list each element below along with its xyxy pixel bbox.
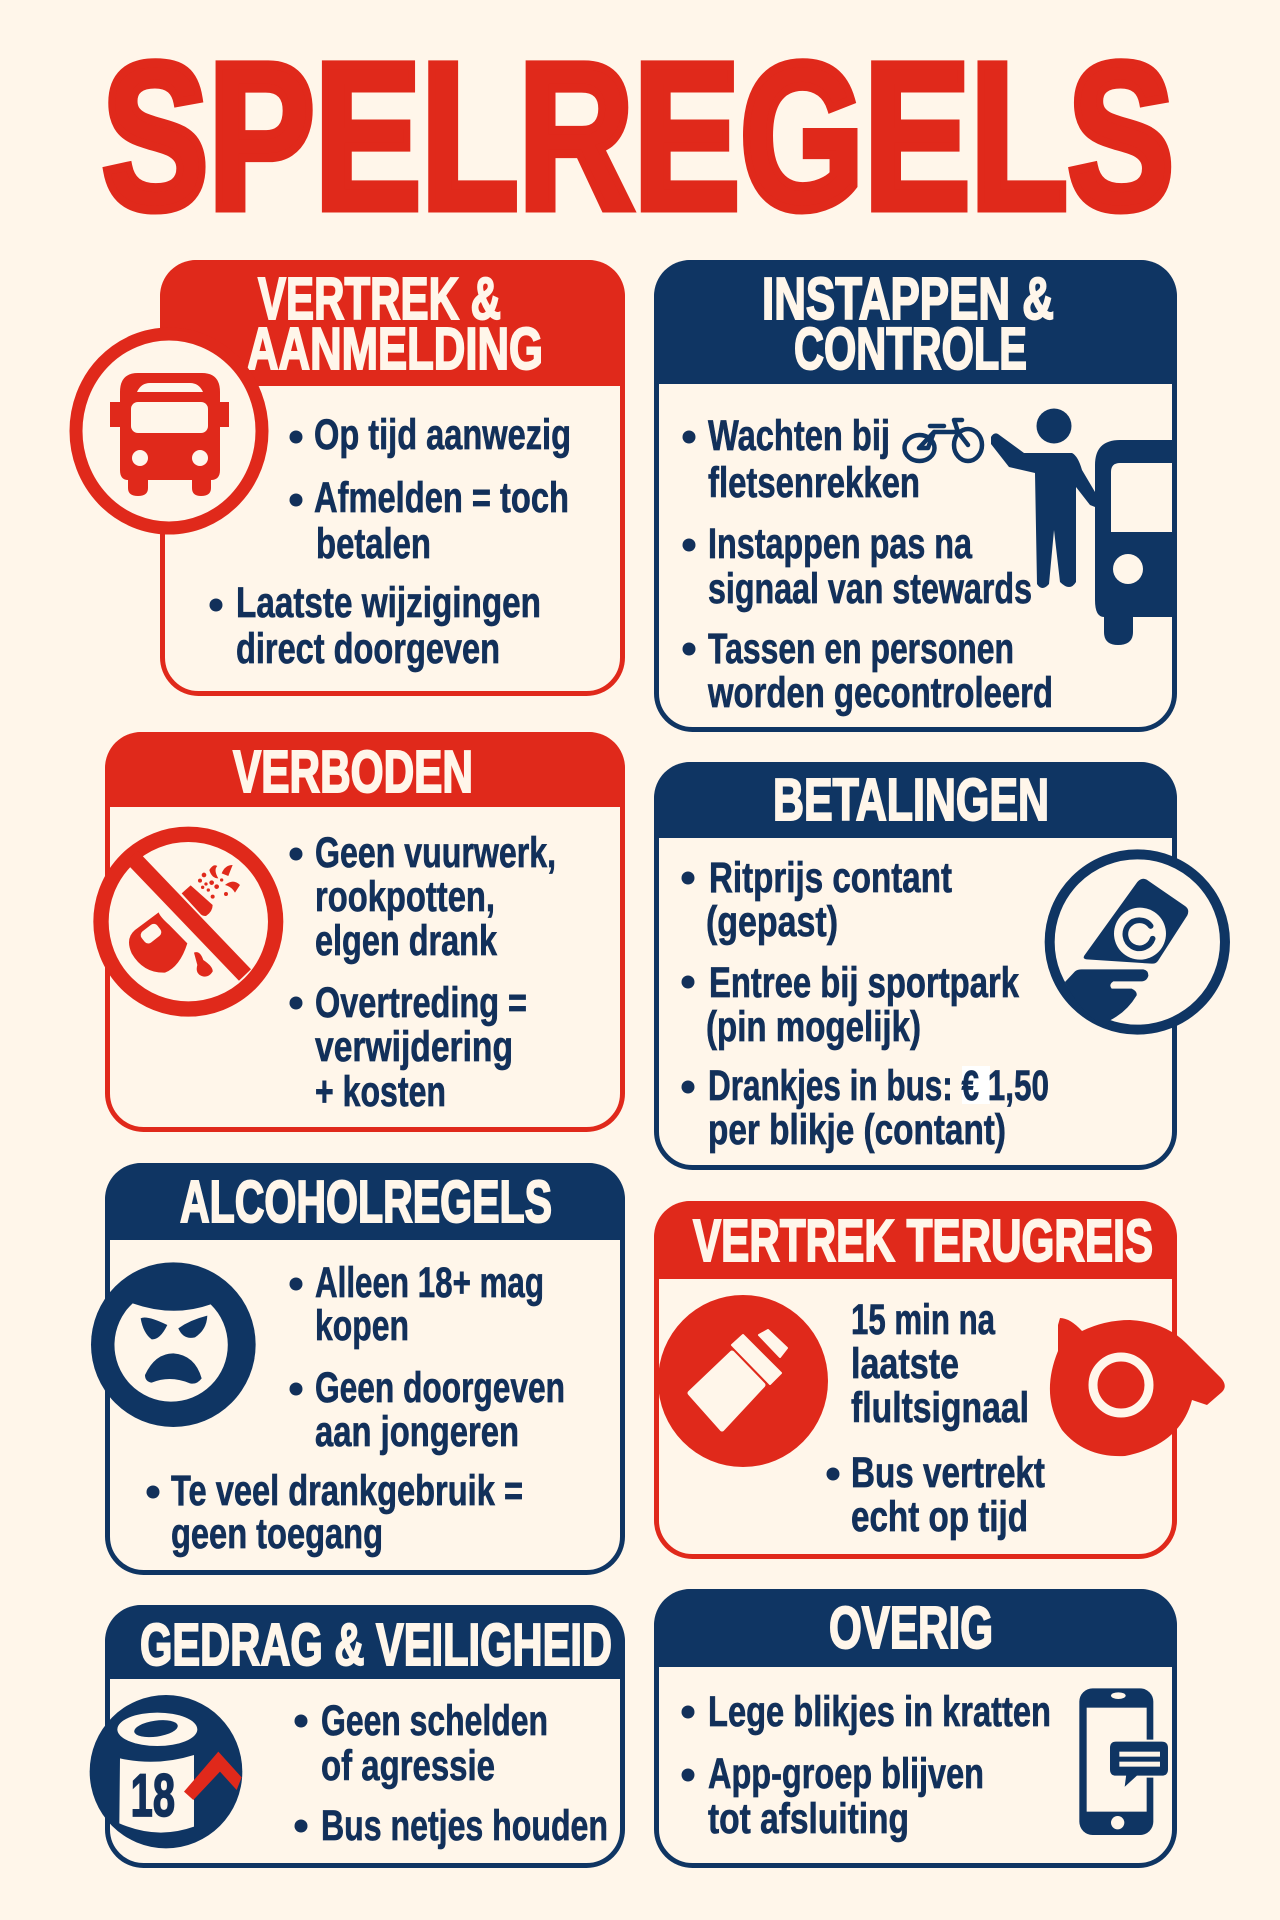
text block: terugreis details: flultsignaal xyxy=(851,1384,1029,1432)
panel: vertrek terugreis xyxy=(654,1201,1225,1556)
text block: instappen bullets: Instappen pas na xyxy=(708,520,973,568)
text block: terugreis details: Bus vertrekt xyxy=(851,1449,1045,1497)
panel: verboden xyxy=(101,732,625,1130)
text block: instappen bullets: Wachten bij xyxy=(708,412,890,460)
icon: bus in circle xyxy=(76,334,262,528)
text block: betalingen bullets: (gepast) xyxy=(706,898,838,946)
text block: overig bullets: App-groep blijven xyxy=(708,1750,984,1798)
icon: whistle xyxy=(1050,1318,1225,1456)
text block: betalingen bullets: Drankjes in bus: € 1,50 xyxy=(708,1062,1049,1110)
text block: instappen bullets: Tassen en personen xyxy=(708,625,1014,673)
heading: vertrek en aanmelding xyxy=(247,266,543,382)
text block: terugreis details: 15 min na xyxy=(851,1296,996,1344)
text block: betalingen bullets: (pin mogelijk) xyxy=(706,1003,921,1051)
panel: betalingen xyxy=(654,762,1225,1168)
text block: instappen bullets: fletsenrekken xyxy=(708,459,920,507)
icon: bottle in red circle xyxy=(658,1295,828,1467)
icon: hand with pin card xyxy=(1050,854,1225,1030)
text block: gedrag bullets xyxy=(294,1697,608,1850)
text block: overig bullets: Lege blikjes in kratten xyxy=(708,1688,1051,1736)
text block: vertrek bullets: betalen xyxy=(316,520,431,568)
heading: vertrek en aanmelding: AANMELDING xyxy=(247,316,543,382)
heading: betalingen: BETALINGEN xyxy=(773,767,1049,833)
panel: gedrag en veiligheid xyxy=(90,1605,625,1866)
heading: instappen en controle: INSTAPPEN & xyxy=(762,266,1054,332)
icon: angry face xyxy=(91,1262,256,1427)
panel: vertrek en aanmelding xyxy=(76,260,625,694)
text block: vertrek bullets: direct doorgeven xyxy=(236,625,500,673)
icon: phone with chat bubble xyxy=(1079,1688,1169,1835)
text block: alcoholregels bullets xyxy=(146,1259,565,1558)
panel: alcoholregels xyxy=(91,1163,625,1572)
heading: instappen en controle: CONTROLE xyxy=(794,316,1027,382)
text block: verboden bullets: Overtreding = xyxy=(315,979,527,1027)
text block: alcoholregels bullets: geen toegang xyxy=(171,1510,383,1558)
text block: verboden bullets: elgen drank xyxy=(315,917,497,965)
icon: prohibited fireworks and drink xyxy=(101,834,276,1009)
text block: overig bullets xyxy=(682,1688,1051,1843)
text block: vertrek bullets: Op tijd aanwezig xyxy=(314,411,571,459)
panel: instappen en controle xyxy=(654,260,1177,730)
text block: gedrag bullets: of agressie xyxy=(321,1742,495,1790)
icon: 18+ can: 18 xyxy=(131,1762,175,1829)
text block: alcoholregels bullets: aan jongeren xyxy=(315,1408,519,1456)
text block: gedrag bullets: Bus netjes houden xyxy=(321,1802,608,1850)
heading: alcoholregels: ALCOHOLREGELS xyxy=(180,1169,552,1235)
text block: alcoholregels bullets: Alleen 18+ mag xyxy=(315,1259,544,1307)
text block: betalingen bullets: Entree bij sportpark xyxy=(709,959,1019,1007)
text block: verboden bullets: verwijdering xyxy=(315,1023,513,1071)
text block: vertrek bullets: Afmelden = toch xyxy=(314,474,569,522)
text block: overig bullets: tot afsluiting xyxy=(708,1795,909,1843)
icon: bicycle xyxy=(904,420,982,461)
heading: verboden: VERBODEN xyxy=(233,739,473,805)
text block: alcoholregels bullets: kopen xyxy=(315,1302,409,1350)
text block: instappen bullets: worden gecontroleerd xyxy=(707,669,1053,717)
text block: terugreis details: laatste xyxy=(851,1340,959,1388)
text block: vertrek bullets xyxy=(210,411,571,673)
text block: gedrag bullets: Geen schelden xyxy=(321,1697,548,1745)
icon: 18+ can xyxy=(90,1695,242,1848)
text block: terugreis details xyxy=(826,1296,1045,1541)
icon: bus side xyxy=(1095,440,1172,645)
heading: vertrek en aanmelding: VERTREK & xyxy=(258,266,501,332)
text block: instappen bullets: signaal van stewards xyxy=(708,565,1032,613)
heading: overig: OVERIG xyxy=(829,1595,993,1661)
text block: instappen bullets xyxy=(682,412,1053,717)
heading: instappen en controle xyxy=(762,266,1054,382)
text block: terugreis details: echt op tijd xyxy=(851,1493,1028,1541)
heading: gedrag en veiligheid: GEDRAG & VEILIGHEID xyxy=(140,1612,612,1678)
text block: verboden bullets xyxy=(290,829,556,1116)
panel: overig xyxy=(654,1589,1177,1866)
text block: alcoholregels bullets: Te veel drankgebruik = xyxy=(171,1467,523,1515)
text block: verboden bullets: + kosten xyxy=(315,1068,446,1116)
text block: alcoholregels bullets: Geen doorgeven xyxy=(315,1364,565,1412)
text block: betalingen bullets xyxy=(682,854,1049,1154)
text block: verboden bullets: rookpotten, xyxy=(315,873,495,921)
text block: betalingen bullets: Ritprijs contant xyxy=(709,854,952,902)
icon: steward pointing xyxy=(991,408,1095,588)
text block: vertrek bullets: Laatste wijzigingen xyxy=(236,579,541,627)
text block: verboden bullets: Geen vuurwerk, xyxy=(315,829,556,877)
text block: betalingen bullets: per blikje (contant) xyxy=(708,1106,1006,1154)
